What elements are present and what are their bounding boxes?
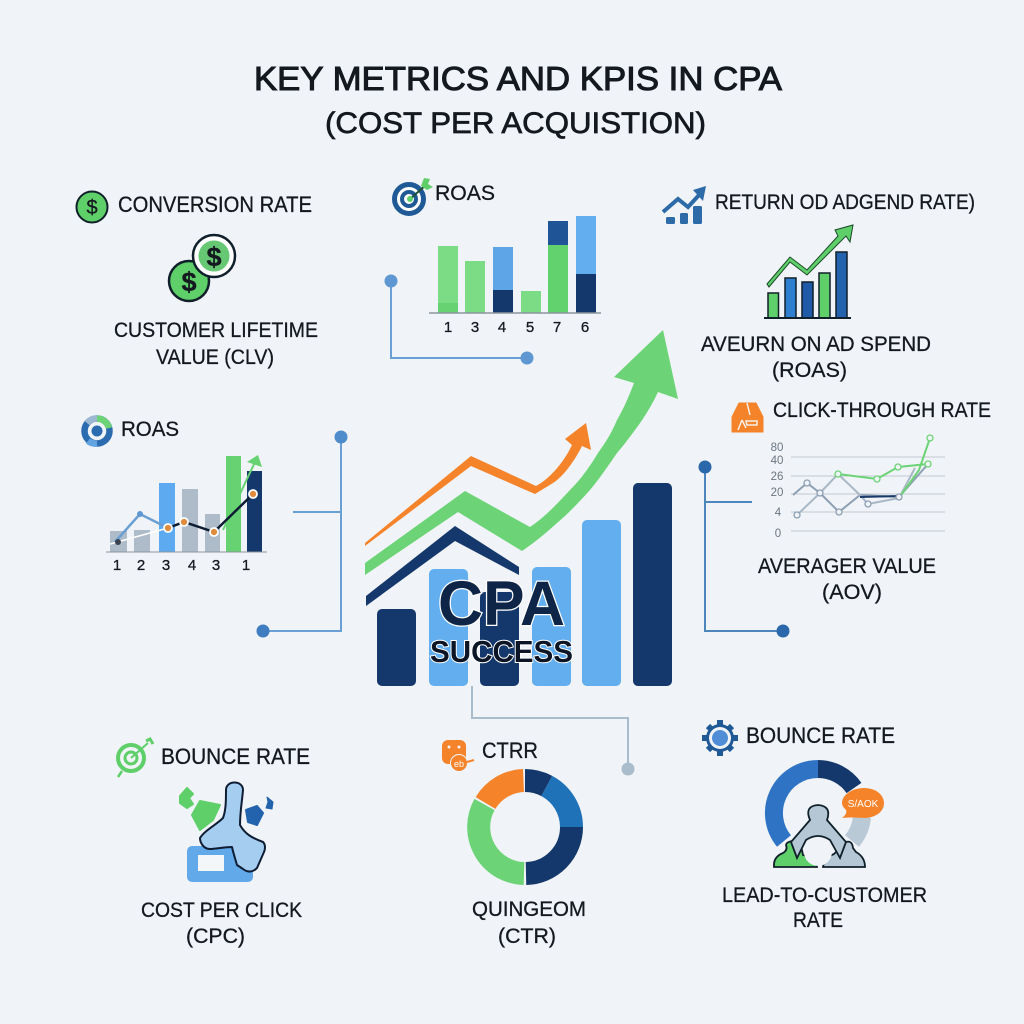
heading: bounce rate: BOUNCE RATE <box>746 723 895 748</box>
connector: bottom donut <box>472 686 634 776</box>
label: CTR <box>472 898 586 948</box>
panel: conversion rate and CLV <box>76 192 318 369</box>
gauge with people <box>774 769 884 867</box>
combo chart: 2 <box>137 557 145 574</box>
label: average order value: (AOV) <box>822 581 882 604</box>
bar group <box>377 483 672 686</box>
chart: rising bars <box>764 225 853 318</box>
heading: CTRR: CTRR <box>482 738 538 763</box>
label: average order value: AVERAGER VALUE <box>758 555 936 578</box>
label: average order value <box>758 555 936 604</box>
bar chart: ROAS: 3 <box>471 319 479 336</box>
panel: click-through rate <box>732 399 991 604</box>
line chart: 26 <box>771 471 783 483</box>
line chart: 20 <box>771 487 783 499</box>
icon: dollar circle: $ <box>86 197 98 219</box>
combo chart <box>106 455 267 574</box>
success label: SUCCESS <box>430 634 573 669</box>
icon: coins: $ <box>181 267 197 297</box>
label: return on ad spend: (ROAS) <box>772 359 847 382</box>
panel: left ROAS chart <box>84 418 267 574</box>
donut chart <box>479 780 572 874</box>
bar chart: ROAS: 1 <box>444 319 452 336</box>
label: cost per click: COST PER CLICK <box>141 899 302 922</box>
combo chart: 1 <box>113 557 121 574</box>
line chart: 40 <box>771 455 783 467</box>
line chart <box>771 435 945 540</box>
label: cost per click: (CPC) <box>186 925 245 948</box>
icon: dollar circle <box>76 192 108 222</box>
label: lead-to-customer rate <box>722 884 927 932</box>
combo chart: 3 <box>212 557 220 574</box>
label: customer lifetime value: VALUE (CLV) <box>156 346 274 369</box>
label: CTR: (CTR) <box>498 925 556 948</box>
icon: trend bars <box>663 186 706 224</box>
label: cost per click <box>141 899 302 948</box>
central graphic: CPA success <box>365 330 678 686</box>
icon: hand on card <box>180 782 273 882</box>
title: KEY METRICS AND KPIS IN CPA <box>254 60 782 97</box>
green growth arrow <box>365 330 678 575</box>
gauge with people: S/AOK <box>848 799 879 810</box>
bar chart: ROAS: 4 <box>498 319 506 336</box>
line chart: 80 <box>771 442 783 454</box>
panel: CTR donut <box>442 738 586 948</box>
bar chart: ROAS: 5 <box>526 319 534 336</box>
heading: click-through rate: CLICK-THROUGH RATE <box>773 399 991 422</box>
label: customer lifetime value <box>114 319 318 369</box>
navy roof <box>366 526 519 606</box>
icon: coins: $ <box>206 242 222 272</box>
icon: gear <box>702 720 738 756</box>
label: return on ad spend: AVEURN ON AD SPEND <box>701 333 931 356</box>
label: return on ad spend <box>701 333 931 382</box>
orange growth arrow <box>365 423 591 546</box>
panel: return on ad spend <box>663 186 975 382</box>
panel: top ROAS chart <box>394 178 601 336</box>
heading: ROAS: ROAS <box>121 418 179 441</box>
icon: target with dart <box>394 178 433 214</box>
line chart: 4 <box>775 507 782 519</box>
icon: orange badge <box>442 740 474 772</box>
heading: return rate: RETURN OD ADGEND RATE) <box>715 191 975 214</box>
label: lead-to-customer rate: LEAD-TO-CUSTOMER <box>722 884 927 907</box>
heading: bounce rate: BOUNCE RATE <box>161 744 310 769</box>
bar chart: ROAS <box>429 216 601 336</box>
icon: coins <box>169 235 235 301</box>
icon: orange house <box>732 403 763 432</box>
icon: orange badge: eb <box>454 759 464 769</box>
CPA label: CPA <box>438 569 565 639</box>
combo chart: 4 <box>188 557 196 574</box>
line chart: 0 <box>775 528 781 540</box>
bar chart: ROAS: 7 <box>553 319 561 336</box>
label: customer lifetime value: CUSTOMER LIFETIME <box>114 319 318 342</box>
label: CTR: QUINGEOM <box>472 898 586 921</box>
combo chart: 3 <box>162 557 170 574</box>
bar chart: ROAS: 6 <box>581 319 589 336</box>
title <box>254 60 782 140</box>
label: lead-to-customer rate: RATE <box>793 909 843 932</box>
connector: top chart <box>384 274 534 364</box>
heading: ROAS: ROAS <box>435 182 495 205</box>
icon: green target <box>118 739 153 777</box>
connector: left chart <box>256 430 348 638</box>
icon: segmented ring <box>84 418 110 444</box>
heading: conversion rate: CONVERSION RATE <box>118 192 312 217</box>
combo chart: 1 <box>242 557 250 574</box>
panel: bounce rate left <box>118 739 310 948</box>
title: (COST PER ACQUISTION) <box>325 107 706 140</box>
panel: bounce rate right <box>702 720 927 932</box>
connector: right chart <box>698 460 790 638</box>
